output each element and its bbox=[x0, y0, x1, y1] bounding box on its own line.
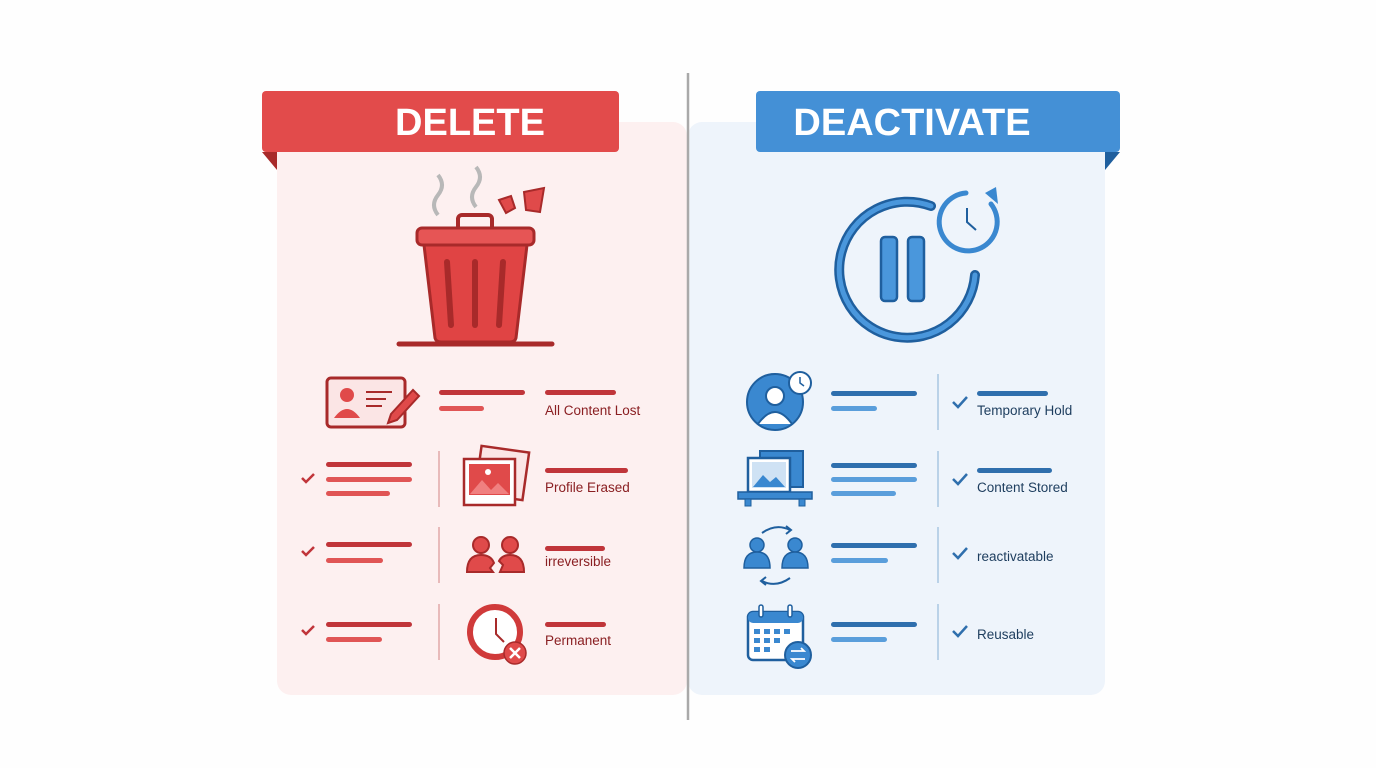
row 4: reusable bbox=[748, 604, 1034, 668]
icon: id card bbox=[327, 378, 419, 427]
row 3: reactivatable: reactivatable bbox=[977, 549, 1054, 564]
panel: deactivate bbox=[688, 91, 1120, 695]
icon: frames on shelf bbox=[738, 451, 812, 506]
row 2: content stored bbox=[738, 451, 1068, 507]
panel: delete bbox=[262, 91, 687, 695]
icon: pause with clock bbox=[839, 187, 998, 338]
row 4: permanent: Permanent bbox=[545, 633, 611, 648]
banner: deactivate bbox=[756, 91, 1120, 170]
icon: photos bbox=[464, 446, 529, 505]
row 2: content stored: Content Stored bbox=[977, 480, 1068, 495]
icon: calendar swap bbox=[748, 605, 811, 668]
row 4: reusable: Reusable bbox=[977, 627, 1034, 642]
icon: people swap bbox=[744, 526, 808, 585]
row 1: all content lost: All Content Lost bbox=[545, 403, 641, 418]
row 3: irreversible bbox=[302, 527, 611, 583]
icon: user with clock bbox=[747, 372, 811, 430]
row 1: temporary hold bbox=[747, 372, 1072, 430]
banner: delete: DELETE bbox=[395, 102, 545, 144]
row 2: profile erased bbox=[302, 446, 630, 507]
icon: broken people bbox=[467, 537, 524, 572]
row 3: reactivatable bbox=[744, 526, 1054, 585]
row 3: irreversible: irreversible bbox=[545, 554, 611, 569]
row 4: permanent bbox=[302, 604, 611, 664]
divider: center line bbox=[687, 73, 689, 720]
icon: trash can bbox=[399, 167, 552, 344]
row 2: profile erased: Profile Erased bbox=[545, 480, 630, 495]
row 1: all content lost bbox=[327, 378, 641, 427]
icon: clock with x bbox=[470, 607, 526, 664]
row 1: temporary hold: Temporary Hold bbox=[977, 403, 1072, 418]
banner: delete bbox=[262, 91, 619, 170]
banner: deactivate: DEACTIVATE bbox=[793, 102, 1031, 144]
